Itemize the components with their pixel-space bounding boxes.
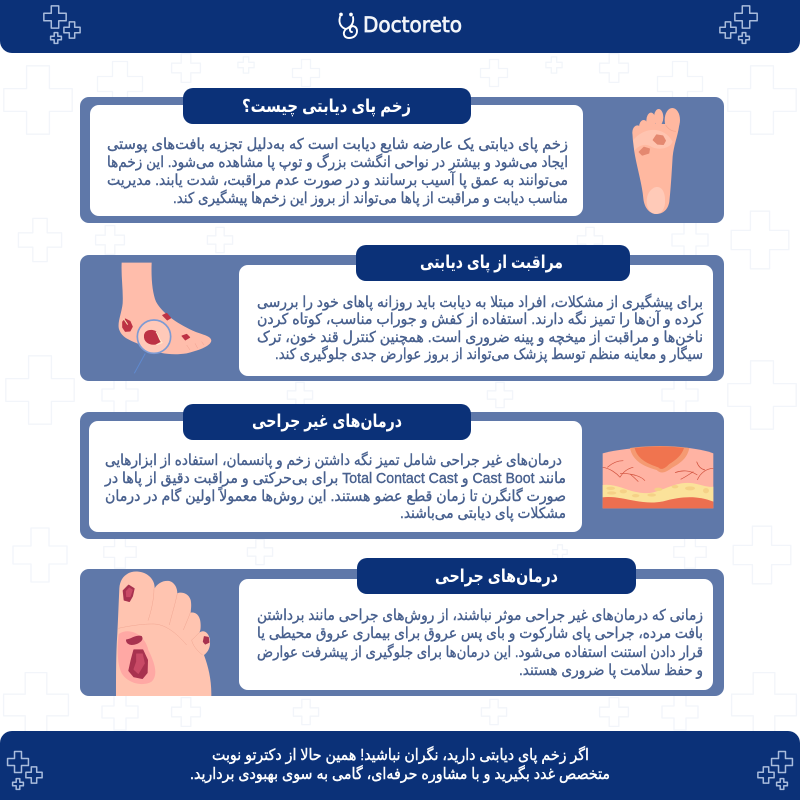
body text: درمان‌های غیر جراحی شامل تمیز نگه داشتن زخم و پانسمان، استفاده از ابزارهایی	[105, 451, 562, 470]
text card	[239, 579, 713, 690]
heading tab: درمان‌های غیر جراحی	[252, 411, 402, 432]
body text: و حفظ سلامت پا ضروری هستند.	[519, 662, 703, 680]
body text: کرده و آن‌ها را تمیز نگه دارند. استفاده از کفش و جوراب مناسب، کوتاه کردن	[257, 310, 704, 328]
body text	[107, 136, 568, 208]
footer text	[190, 746, 610, 784]
body text	[257, 607, 703, 680]
footer text: اگر زخم پای دیابتی دارید، نگران نباشید! همین حالا از دکترتو نوبت	[212, 746, 589, 765]
panel: what is a diabetic foot ulcer	[80, 88, 724, 223]
header bar	[0, 0, 800, 53]
body text: ایجاد می‌شود و بیشتر در نواحی انگشت بزرگ و توپ پا مشاهده می‌شود. این زخم‌ها	[107, 153, 568, 172]
text card	[89, 421, 582, 532]
icon: crosses bottom right	[758, 752, 792, 789]
body text: قرار دادن استنت استفاده می‌شود. این درمان‌ها برای جلوگیری از پیشرفت عوارض	[257, 643, 703, 662]
illustration: skin cross-section with wound	[603, 446, 713, 508]
icon: crosses bottom left	[8, 752, 42, 789]
footer bar	[0, 731, 800, 800]
heading tab: زخم پای دیابتی چیست؟	[242, 96, 411, 117]
body text: زمانی که درمان‌های غیر جراحی موثر نباشند، از روش‌های جراحی مانند برداشتن	[257, 607, 703, 624]
body text: مشکلات پای دیابتی می‌باشند.	[400, 505, 566, 523]
body text: سیگار و معاینه منظم توسط پزشک می‌تواند از بروز عوارض جدی جلوگیری کند.	[275, 345, 703, 364]
icon: magnifying glass	[134, 320, 171, 373]
body text	[104, 451, 566, 523]
body text: ناخن‌ها و مراقبت از میخچه و پینه ضروری است. همچنین کنترل قند خون، ترک	[257, 329, 703, 347]
body text: زخم پای دیابتی یک عارضه شایع دیابت است که به‌دلیل تجزیه بافت‌های پوستی	[107, 136, 568, 154]
illustration: toes with ulcers	[116, 572, 211, 696]
panel: diabetic foot care	[80, 245, 724, 381]
body text: بافت مرده، جراحی پای شارکوت و بای پس عروق برای بیماری عروق محیطی یا	[257, 625, 703, 643]
icon: crosses top right	[720, 6, 757, 43]
heading tab	[357, 558, 636, 594]
heading tab: مراقبت از پای دیابتی	[420, 252, 563, 273]
text card	[239, 265, 713, 376]
footer text: متخصص غدد بگیرید و با مشاوره حرفه‌ای، گامی به سوی بهبودی بردارید.	[190, 765, 610, 784]
logo wordmark: Doctoreto	[363, 13, 462, 37]
heading tab: درمان‌های جراحی	[435, 566, 558, 587]
body text: صورت گانگرن تا زمان قطع عضو هستند. این روش‌ها معمولاً اولین گام در درمان	[105, 486, 566, 505]
panel: non-surgical treatments	[80, 404, 724, 539]
body text: مناسب دیابت و مراقبت از پاها می‌تواند از بروز این زخم‌ها پیشگیری کند.	[173, 189, 568, 208]
icon: stethoscope	[339, 14, 357, 38]
text card	[90, 105, 583, 216]
icon: crosses top left	[44, 6, 80, 43]
panel: surgical treatments	[80, 558, 724, 696]
body text: برای پیشگیری از مشکلات، افراد مبتلا به دیابت باید روزانه پاهای خود را بررسی	[257, 293, 703, 312]
body text: مانند Cast Boot و Total Contact Cast برای بی‌حرکتی و مراقبت دقیق از پاها در	[104, 470, 566, 488]
illustration: foot with magnified ulcer	[119, 263, 211, 373]
body text: می‌توانند به عمق پا آسیب برسانند و در صورت عدم مراقبت، شدت یابند. مدیریت	[107, 171, 568, 190]
logo	[339, 13, 462, 38]
heading tab	[356, 245, 630, 281]
illustration: foot sole with ulcers	[632, 108, 680, 214]
body text	[257, 293, 704, 364]
heading tab	[183, 404, 471, 440]
heading tab	[183, 88, 471, 124]
